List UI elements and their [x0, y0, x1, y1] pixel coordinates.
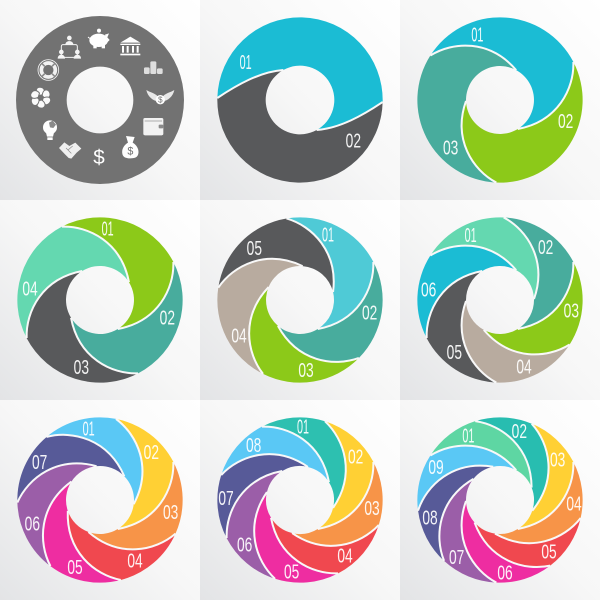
segment 03	[386, 25, 554, 191]
panel: seven-step ring	[0, 400, 200, 600]
segment 05: 05	[247, 237, 262, 260]
panel: three-step ring	[386, 0, 600, 200]
segment 07: 07	[449, 546, 464, 569]
segment 01	[255, 209, 385, 340]
segment 05: 05	[67, 556, 83, 579]
panel: four-step ring	[0, 200, 200, 400]
segment 08	[408, 458, 517, 564]
segment 08: 08	[246, 434, 261, 457]
icon: money bag	[122, 136, 138, 158]
segment 06	[5, 451, 126, 570]
segment 03	[483, 260, 584, 356]
segment 02	[460, 59, 584, 185]
segment 03	[292, 460, 384, 547]
segment 04	[16, 225, 130, 341]
segment 05: 05	[541, 540, 557, 563]
panel: nine-step ring	[400, 400, 600, 600]
segment 06: 06	[497, 562, 513, 585]
icon: bank	[120, 37, 140, 55]
segment 02: 02	[512, 420, 527, 443]
segment 04	[446, 267, 575, 398]
segment 04: 04	[127, 549, 143, 572]
segment 05	[253, 492, 340, 584]
panel: five-step ring	[197, 200, 400, 400]
segment 02	[458, 209, 589, 341]
segment 03: 03	[564, 299, 579, 322]
segment 03: 03	[163, 501, 178, 524]
segment 03: 03	[364, 497, 380, 520]
segment 02: 02	[558, 110, 573, 133]
icon: piggy bank	[88, 29, 110, 48]
segment 08: 08	[422, 507, 438, 530]
segment 04: 04	[231, 324, 247, 347]
segment 05: 05	[447, 341, 462, 364]
icon: wallet	[143, 118, 163, 135]
segment 01: 01	[462, 424, 474, 447]
segment 04: 04	[337, 544, 353, 567]
segment 05	[411, 259, 542, 391]
segment 02	[277, 259, 384, 363]
icon: winged dollar: $	[158, 95, 163, 104]
icon: handshake	[59, 142, 81, 159]
segment 05	[469, 467, 588, 586]
icon: idea bulb	[43, 120, 57, 140]
segment 02	[70, 259, 184, 375]
segment 07: 07	[218, 487, 234, 510]
segment 04	[263, 467, 386, 591]
icon: dollar sign: $	[93, 146, 105, 169]
segment 04	[55, 467, 182, 595]
segment 02	[460, 411, 558, 512]
segment 08	[214, 409, 337, 533]
segment 01	[260, 415, 347, 508]
segment 04	[495, 460, 584, 545]
segment 04	[197, 238, 340, 380]
segment 03	[25, 270, 141, 384]
segment 03: 03	[550, 449, 565, 472]
panel: icon ring	[0, 0, 200, 200]
segment 01	[59, 216, 175, 330]
segment 02	[267, 414, 391, 537]
segment 07	[421, 474, 536, 591]
segment 01: 01	[297, 415, 309, 438]
segment 03	[88, 460, 184, 551]
segment 06: 06	[237, 533, 252, 556]
segment 09: 09	[428, 456, 444, 479]
icon: lifebuoy	[38, 60, 59, 80]
segment 07	[216, 453, 308, 540]
segment 03: 03	[443, 137, 458, 160]
segment 03	[472, 417, 591, 536]
panel: six-step ring	[400, 200, 600, 400]
segment 03: 03	[298, 359, 314, 382]
segment 02	[217, 70, 383, 183]
icon: flower	[29, 87, 52, 108]
segment 01: 01	[465, 224, 477, 247]
icon: winged dollar	[146, 90, 174, 104]
segment 04: 04	[516, 355, 532, 378]
segment 01	[425, 407, 539, 523]
icon: money bag: $	[127, 146, 133, 158]
segment 05: 05	[284, 560, 299, 583]
segment 01: 01	[83, 418, 95, 441]
segment 02: 02	[538, 236, 553, 259]
segment 06	[209, 463, 333, 586]
segment 01: 01	[102, 218, 114, 241]
grey ring	[16, 16, 184, 184]
segment 02: 02	[346, 129, 361, 152]
segment 02: 02	[144, 441, 159, 464]
panel: eight-step ring	[200, 400, 400, 600]
segment 01	[425, 0, 591, 152]
segment 06: 06	[421, 278, 436, 301]
segment 07	[8, 419, 132, 540]
segment 01	[425, 202, 554, 333]
segment 06: 06	[25, 513, 40, 536]
segment 01	[217, 17, 383, 130]
segment 05	[210, 201, 354, 345]
segment 02: 02	[362, 302, 377, 325]
segment 02: 02	[348, 445, 363, 468]
segment 04: 04	[566, 493, 582, 516]
segment 02: 02	[160, 307, 175, 330]
segment 06	[457, 490, 552, 588]
segment 02	[63, 411, 190, 539]
icon: org chart	[58, 36, 81, 59]
segment 05	[32, 478, 141, 590]
panel: two-step ring	[200, 0, 400, 200]
segment 06	[416, 244, 517, 340]
segment 07: 07	[32, 451, 47, 474]
segment 01: 01	[240, 51, 252, 74]
segment 01: 01	[471, 24, 483, 47]
segment 03: 03	[74, 356, 89, 379]
segment 03	[236, 268, 362, 397]
segment 04: 04	[22, 278, 38, 301]
segment 01: 01	[322, 223, 334, 246]
segment 09	[408, 430, 519, 539]
segment 01	[45, 409, 150, 518]
icon: coin stacks	[144, 61, 163, 74]
